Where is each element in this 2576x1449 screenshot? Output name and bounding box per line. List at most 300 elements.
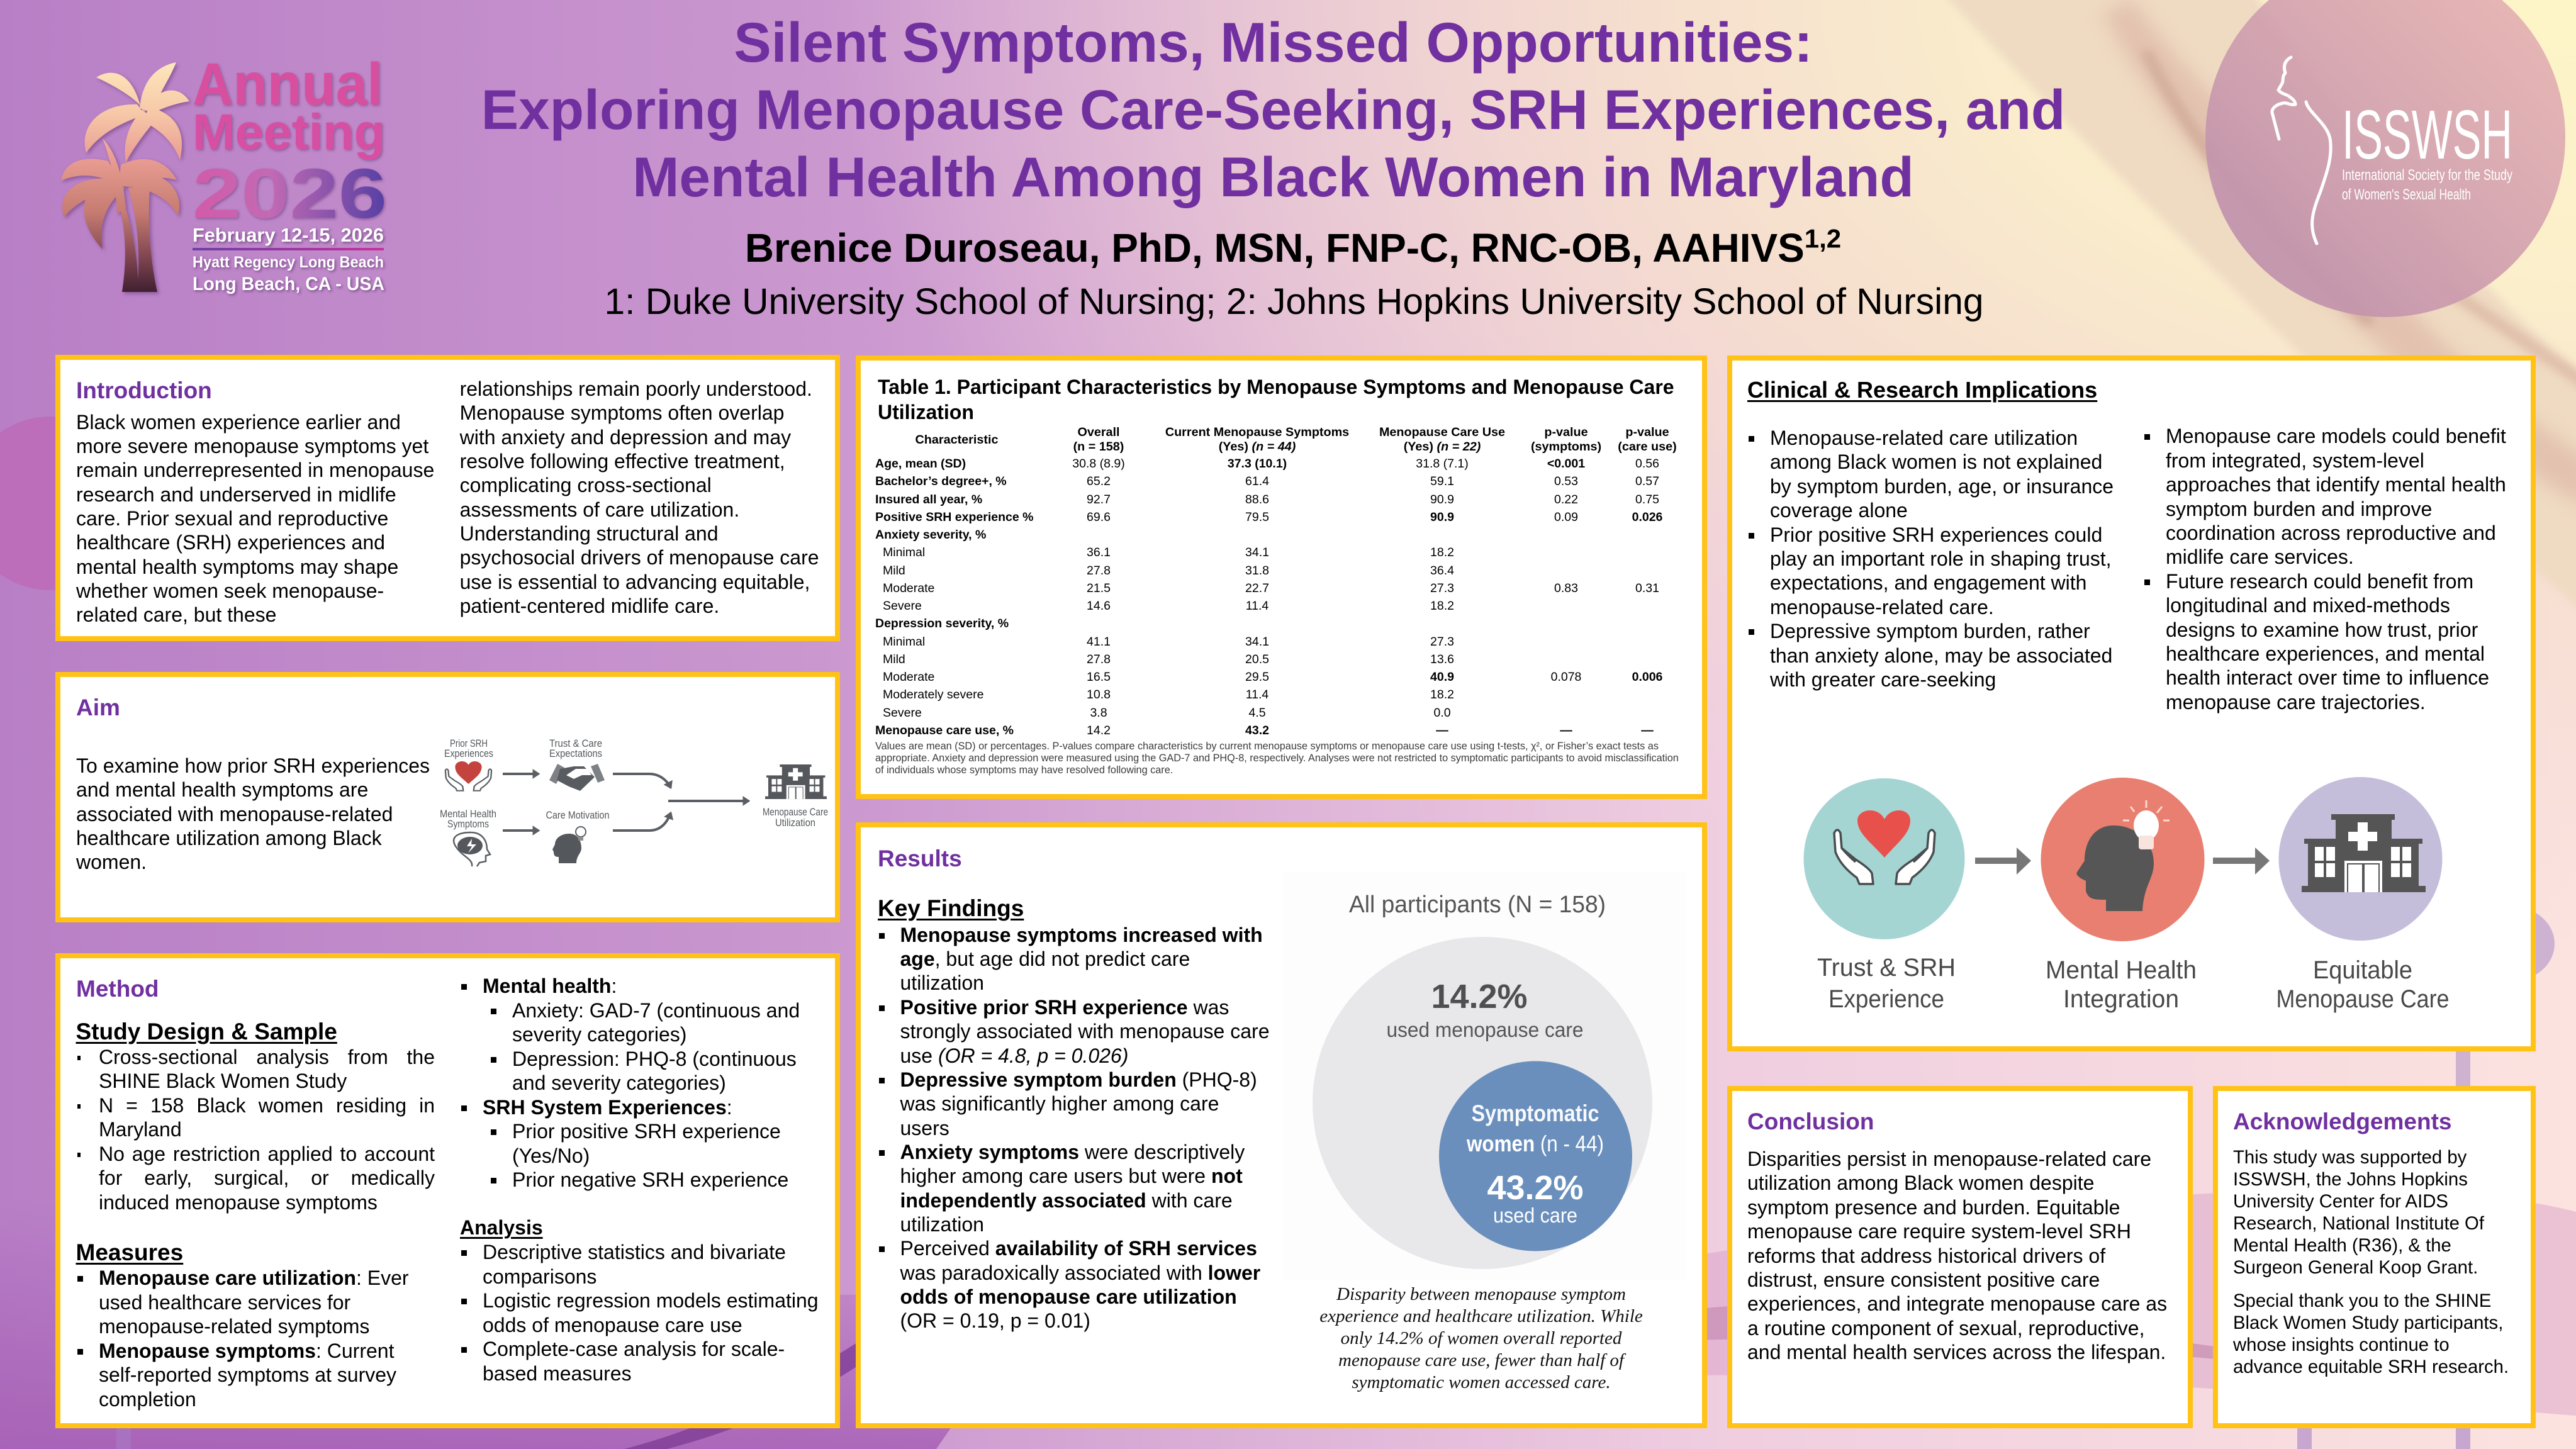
list: key findings: Anxiety symptoms were descriptively [900, 1141, 1245, 1163]
icon: brain in head [454, 832, 490, 866]
list: key findings: Positive prior SRH experience was [900, 996, 1229, 1019]
participant characteristics table: 34.1 [1245, 545, 1269, 559]
participant characteristics table: 20.5 [1245, 652, 1269, 666]
participant characteristics table: Menopause Care Use [1379, 425, 1505, 439]
list: mental health and SRH measures: Anxiety: GAD-7 (continuous and [512, 999, 800, 1022]
panel: method [55, 953, 840, 1428]
participant characteristics table: 0.22 [1554, 493, 1578, 506]
participant characteristics table: Anxiety severity, % [875, 528, 986, 542]
text: conclusion: utilization among Black women despite [1747, 1172, 2094, 1194]
text: funding: Mental Health (R36), & the [2233, 1235, 2451, 1256]
conceptual model diagram: Utilization [775, 817, 815, 829]
participant characteristics table [875, 425, 1677, 737]
heading: implications: Clinical & Research Implications [1747, 377, 2097, 403]
pathway labels: Experience [1828, 985, 1944, 1013]
text: conclusion: a routine component of sexual, reproductive, [1747, 1317, 2144, 1340]
list: mental health and SRH measures: Prior positive SRH experience [512, 1120, 781, 1143]
participant characteristics table: 90.9 [1430, 493, 1454, 506]
text: conclusion: menopause care require system-level SRH [1747, 1220, 2131, 1243]
list: implications left: coverage alone [1770, 499, 1908, 522]
title: Exploring Menopause Care-Seeking, SRH Experiences, and [481, 78, 2065, 141]
participant characteristics table: 34.1 [1245, 635, 1269, 649]
participant characteristics table: — [1560, 724, 1572, 737]
icon: head with light bulb [552, 827, 586, 863]
list: mental health and SRH measures: and severity categories) [512, 1071, 726, 1094]
panel: table 1 [856, 355, 1707, 799]
participant characteristics table: 40.9 [1430, 670, 1454, 684]
participant characteristics table: Minimal [883, 635, 925, 649]
text: introduction right column: complicating cross-sectional [460, 474, 712, 496]
table footnote: of individuals whose symptoms may have resolved following care. [875, 764, 1173, 776]
participant characteristics table: 88.6 [1245, 493, 1269, 506]
conceptual model diagram: Trust & Care [549, 737, 602, 749]
participant characteristics table: Positive SRH experience % [875, 510, 1033, 524]
heading: aim: Aim [76, 695, 120, 720]
author: Brenice Duroseau, PhD, MSN, FNP-C, RNC-OB, AAHIVS1,2 [745, 224, 1841, 271]
pathway labels: Integration [2063, 985, 2179, 1013]
list: implications right: symptom burden and improve [2166, 498, 2432, 520]
list: key findings: (OR = 0.19, p = 0.01) [900, 1309, 1090, 1332]
label: symptomatic women [1466, 1100, 1604, 1156]
list: key findings: utilization [900, 971, 984, 994]
participant characteristics table: 14.2 [1087, 724, 1111, 737]
list: analysis bullets: Logistic regression models estimating [483, 1289, 819, 1312]
participant characteristics table: 0.83 [1554, 581, 1578, 595]
text: conclusion: distrust, ensure consistent positive care [1747, 1268, 2100, 1291]
icon: hands with heart [445, 761, 491, 791]
list: key findings: Menopause symptoms increased with [900, 924, 1263, 946]
participant characteristics table: 36.4 [1430, 564, 1454, 578]
list: implications left: expectations, and engagement with [1770, 571, 2086, 594]
participant characteristics table: p-value [1625, 425, 1669, 439]
text: introduction right column: resolve following effective treatment, [460, 450, 785, 473]
list: implications left: Prior positive SRH experiences could [1770, 523, 2102, 546]
text: thanks: Special thank you to the SHINE [2233, 1290, 2491, 1311]
icon: teal circle with hands and heart [1803, 778, 1964, 939]
text: introduction right column: use is essential to advancing equitable, [460, 571, 810, 593]
list: implications right: healthcare experiences, and mental [2166, 642, 2485, 665]
logo tagline: International Society for the Study [2342, 167, 2512, 184]
participant characteristics table: 22.7 [1245, 581, 1269, 595]
subheading: measures: Measures [76, 1239, 183, 1265]
list: mental health and SRH measures [461, 975, 800, 1191]
list: key findings: strongly associated with menopause care [900, 1020, 1269, 1043]
chart caption: Disparity between menopause symptom [1336, 1284, 1626, 1304]
chart caption [1319, 1284, 1643, 1392]
text: introduction right column: with anxiety and depression and may [460, 426, 791, 449]
participant characteristics table: Mild [883, 652, 905, 666]
pathway labels: Equitable [2313, 956, 2412, 984]
participant characteristics table: Severe [883, 599, 922, 613]
conceptual model diagram: Expectations [549, 747, 602, 759]
participant characteristics table: 21.5 [1087, 581, 1111, 595]
heading: method: Method [76, 975, 159, 1002]
conceptual model diagram: Care Motivation [546, 809, 609, 821]
chart caption: symptomatic women accessed care. [1352, 1372, 1611, 1392]
list: implications left: play an important role in shaping trust, [1770, 547, 2112, 570]
list: analysis bullets: Descriptive statistics and bivariate [483, 1241, 786, 1263]
participant characteristics table: <0.001 [1547, 457, 1585, 471]
text: introduction left column: healthcare (SRH) experiences and [76, 531, 385, 554]
table footnote [875, 741, 1679, 776]
table title: Table 1. Participant Characteristics by Menopause Symptoms and Menopause Care [878, 376, 1674, 398]
text: funding [2233, 1146, 2484, 1279]
participant characteristics table: 13.6 [1430, 652, 1454, 666]
label: used menopause care: used menopause care [1387, 1018, 1583, 1041]
list: mental health and SRH measures: Mental health: [483, 975, 617, 997]
logo word: Annual: Annual [193, 51, 383, 118]
list: key findings [879, 924, 1269, 1332]
participant characteristics table: 0.56 [1635, 457, 1659, 471]
arrow: trust to convergence [613, 774, 671, 788]
text: introduction left column: remain underrepresented in menopause [76, 459, 434, 481]
list: analysis bullets: based measures [483, 1362, 632, 1385]
arrow: prior SRH to trust [503, 773, 539, 775]
participant characteristics table: 0.026 [1632, 510, 1662, 524]
participant characteristics table: Moderate [883, 670, 934, 684]
participant characteristics table: 0.57 [1635, 474, 1659, 488]
text: introduction right column: assessments of care utilization. [460, 498, 739, 521]
table footnote: appropriate. Anxiety and depression were measured using the GAD-7 and PHQ-8, respectively. Analyses were not restricted to symptomatic participants to avoid misclassification [875, 752, 1679, 764]
list: implications right [2144, 425, 2506, 713]
list: measures bullets: completion [99, 1388, 196, 1411]
list: study design bullets: Cross-sectional analysis from the [99, 1046, 435, 1068]
participant characteristics table: 27.8 [1087, 652, 1111, 666]
logo venue: Hyatt Regency Long Beach [193, 254, 384, 271]
participant characteristics table: 0.31 [1635, 581, 1659, 595]
list: implications left: menopause-related care. [1770, 596, 1994, 618]
logo location: Long Beach, CA - USA [193, 274, 384, 294]
participant characteristics table: 30.8 (8.9) [1072, 457, 1125, 471]
participant characteristics table: 27.3 [1430, 635, 1454, 649]
text: thanks: advance equitable SRH research. [2233, 1357, 2509, 1377]
arrow: mental health to equitable care [2213, 848, 2270, 875]
panel: results [856, 822, 1707, 1428]
participant characteristics table: 65.2 [1087, 474, 1111, 488]
participant characteristics table: 0.09 [1554, 510, 1578, 524]
text: introduction right column: patient-centered midlife care. [460, 595, 719, 617]
list: study design bullets [77, 1046, 435, 1213]
conceptual model diagram: Experiences [444, 747, 493, 759]
list: measures bullets [77, 1267, 409, 1411]
logo tagline [2342, 167, 2512, 203]
text: introduction left column: more severe menopause symptoms yet [76, 435, 428, 457]
participant characteristics table: Overall [1077, 425, 1120, 439]
pathway diagram [1803, 777, 2449, 1013]
logo line figure [2272, 57, 2331, 243]
chart caption: experience and healthcare utilization. While [1319, 1306, 1643, 1326]
circle: all participants [1313, 937, 1652, 1269]
label: used care: used care [1493, 1204, 1577, 1227]
list: implications left: than anxiety alone, may be associated [1770, 644, 2112, 667]
circle: symptomatic women [1439, 1061, 1632, 1251]
text: aim statement: women. [76, 851, 147, 873]
participant characteristics table: 0.078 [1551, 670, 1581, 684]
panel: clinical and research implications [1727, 355, 2536, 1051]
conference logo: Annual Meeting 2026 [61, 51, 387, 297]
title: Silent Symptoms, Missed Opportunities: [734, 11, 1813, 74]
affiliations: 1: Duke University School of Nursing; 2: Johns Hopkins University School of Nursing [605, 281, 1983, 322]
text: funding: University Center for AIDS [2233, 1191, 2448, 1212]
list: implications right: from integrated, system-level [2166, 449, 2424, 472]
list: implications left: with greater care-seeking [1770, 668, 1996, 691]
list: key findings: age, but age did not predict care [900, 948, 1190, 970]
panel: aim [55, 672, 840, 922]
label: symptomatic women: women (n - 44) [1466, 1131, 1604, 1156]
chart caption: only 14.2% of women overall reported [1341, 1328, 1622, 1348]
list: implications right: approaches that identify mental health [2166, 473, 2506, 496]
list: implications right: Menopause care models could benefit [2166, 425, 2506, 447]
list: mental health and SRH measures: SRH System Experiences: [483, 1096, 732, 1119]
logo word: Meeting: Meeting [193, 104, 385, 160]
participant characteristics table: 10.8 [1087, 688, 1111, 702]
text: introduction left column: care. Prior sexual and reproductive [76, 507, 388, 530]
list: measures bullets: self-reported symptoms at survey [99, 1363, 396, 1386]
text: introduction left column: related care, but these [76, 603, 276, 626]
participant characteristics table: 79.5 [1245, 510, 1269, 524]
list: key findings: utilization [900, 1213, 984, 1236]
list: key findings: use (OR = 4.8, p = 0.026) [900, 1044, 1128, 1067]
text: thanks: Black Women Study participants, [2233, 1312, 2503, 1333]
conceptual model diagram: Mental Health [440, 808, 496, 820]
list: analysis bullets: Complete-case analysis for scale- [483, 1338, 785, 1360]
text: conclusion: Disparities persist in menopause-related care [1747, 1148, 2151, 1170]
panel: conclusion [1727, 1086, 2193, 1428]
participant characteristics table: Age, mean (SD) [875, 457, 966, 471]
icon: lavender circle with hospital [2279, 777, 2443, 941]
nested circle chart: care use [1313, 892, 1652, 1392]
list: study design bullets: SHINE Black Women Study [99, 1070, 347, 1092]
list: study design bullets: for early, surgical, or medically [99, 1166, 435, 1189]
participant characteristics table: p-value [1544, 425, 1588, 439]
ISSWSH society logo [2205, 0, 2565, 317]
list: measures bullets: menopause-related symptoms [99, 1315, 369, 1338]
participant characteristics table: 41.1 [1087, 635, 1111, 649]
participant characteristics table: 0.75 [1635, 493, 1659, 506]
participant characteristics table: Depression severity, % [875, 617, 1009, 630]
list: analysis bullets [461, 1241, 819, 1385]
list: key findings: Depressive symptom burden (PHQ-8) [900, 1068, 1257, 1091]
list: study design bullets: No age restriction applied to account [99, 1143, 435, 1165]
subheading: study design: Study Design & Sample [76, 1018, 337, 1044]
list: study design bullets: induced menopause symptoms [99, 1190, 378, 1213]
panel: acknowledgements [2213, 1086, 2536, 1428]
list: mental health and SRH measures: Depression: PHQ-8 (continuous [512, 1047, 797, 1070]
subheading: key findings: Key Findings [878, 895, 1024, 921]
table title [878, 376, 1674, 423]
participant characteristics table: 27.8 [1087, 564, 1111, 578]
list: implications left: among Black women is not explained [1770, 450, 2102, 473]
arrow: to care utilization [668, 800, 749, 802]
list: implications right: health interact over time to influence [2166, 666, 2489, 689]
text: introduction right column [459, 378, 819, 617]
participant characteristics table: 11.4 [1246, 688, 1268, 702]
participant characteristics table: Mild [883, 564, 905, 578]
participant characteristics table: 0.0 [1433, 706, 1451, 720]
text: introduction left column: Black women experience earlier and [76, 410, 401, 433]
participant characteristics table: (n = 158) [1073, 440, 1124, 454]
participant characteristics table: 27.3 [1430, 581, 1454, 595]
icon: hospital [765, 764, 827, 799]
list: implications right: coordination across reproductive and [2166, 522, 2496, 544]
list: implications left: Menopause-related care utilization [1770, 427, 2078, 449]
list: implications left: by symptom burden, age, or insurance [1770, 475, 2114, 498]
participant characteristics table: 90.9 [1430, 510, 1454, 524]
label: symptomatic women: Symptomatic [1471, 1100, 1599, 1126]
participant characteristics table: Bachelor’s degree+, % [875, 474, 1007, 488]
title: Mental Health Among Black Women in Maryland [632, 145, 1914, 208]
text: aim statement: To examine how prior SRH experiences [76, 754, 430, 777]
participant characteristics table: (Yes) (n = 22) [1404, 440, 1481, 454]
table title: Utilization [878, 401, 974, 423]
text: aim statement: associated with menopause-related [76, 803, 393, 825]
participant characteristics table: 16.5 [1087, 670, 1111, 684]
table footnote: Values are mean (SD) or percentages. P-values compare characteristics by current menopause symptoms or menopause care use using t-tests, χ², or Fisher’s exact tests as [875, 741, 1659, 752]
text: conclusion [1747, 1147, 2167, 1365]
list: study design bullets: Maryland [99, 1118, 182, 1141]
stat: 14.2%: 14.2% [1431, 978, 1528, 1015]
text: aim statement [76, 754, 430, 873]
participant characteristics table: — [1436, 724, 1448, 737]
list: implications right: designs to examine how trust, prior [2166, 618, 2478, 641]
participant characteristics table: 36.1 [1087, 545, 1111, 559]
participant characteristics table: 14.6 [1087, 599, 1111, 613]
list: measures bullets: Menopause symptoms: Current [99, 1340, 394, 1362]
text: conclusion: experiences, and integrate menopause care as [1747, 1292, 2167, 1315]
list: analysis bullets: comparisons [483, 1265, 596, 1288]
text: introduction left column [76, 410, 434, 626]
pathway labels [1817, 954, 2449, 1013]
participant characteristics table: 92.7 [1087, 493, 1111, 506]
text: conclusion: symptom presence and burden. Equitable [1747, 1196, 2120, 1219]
text: introduction right column: Menopause symptoms often overlap [460, 401, 784, 424]
participant characteristics table: — [1641, 724, 1654, 737]
participant characteristics table: Severe [883, 706, 922, 720]
text: aim statement: and mental health symptoms are [76, 778, 368, 801]
heading: conclusion: Conclusion [1747, 1109, 1874, 1134]
logo dates: February 12-15, 2026 [193, 224, 384, 246]
list: implications right: Future research could benefit from [2166, 570, 2473, 593]
list: measures bullets: used healthcare services for [99, 1291, 350, 1314]
list: key findings: Perceived availability of SRH services [900, 1237, 1257, 1260]
subheading: analysis: Analysis [460, 1216, 543, 1239]
arrow: mental health to motivation [503, 829, 539, 832]
text: thanks: whose insights continue to [2233, 1334, 2450, 1355]
list: key findings: was significantly higher among care [900, 1092, 1219, 1115]
participant characteristics table: 3.8 [1090, 706, 1107, 720]
stat: 43.2%: 43.2% [1487, 1169, 1584, 1207]
list: implications right: midlife care services. [2166, 545, 2354, 568]
participant characteristics table: Minimal [883, 545, 925, 559]
list: key findings: users [900, 1117, 949, 1139]
text: aim statement: healthcare utilization among Black [76, 827, 382, 849]
participant characteristics table: 4.5 [1248, 706, 1266, 720]
list: implications left: Depressive symptom burden, rather [1770, 620, 2090, 642]
chart caption: menopause care use, fewer than half of [1338, 1350, 1627, 1370]
participant characteristics table: (Yes) (n = 44) [1219, 440, 1296, 454]
pathway labels: Trust & SRH [1817, 954, 1956, 982]
list: implications right: longitudinal and mixed-methods [2166, 594, 2450, 617]
participant characteristics table: Moderate [883, 581, 934, 595]
participant characteristics table: 0.006 [1632, 670, 1662, 684]
text: conclusion: reforms that address historical drivers of [1747, 1245, 2105, 1267]
participant characteristics table: 59.1 [1430, 474, 1454, 488]
participant characteristics table: 31.8 (7.1) [1416, 457, 1469, 471]
conceptual model diagram [440, 737, 828, 867]
list: implications right: menopause care trajectories. [2166, 691, 2426, 713]
list: mental health and SRH measures: Prior negative SRH experience [512, 1168, 788, 1191]
palm tree silhouette [61, 62, 189, 292]
list: study design bullets: N = 158 Black women residing in [99, 1094, 435, 1116]
arrow: motivation to convergence [613, 813, 671, 831]
participant characteristics table: Menopause care use, % [875, 724, 1014, 737]
participant characteristics table: 0.53 [1554, 474, 1578, 488]
list: measures bullets: Menopause care utilization: Ever [99, 1267, 409, 1289]
text: introduction left column: research and underserved in midlife [76, 483, 396, 506]
list: key findings: odds of menopause care utilization [900, 1285, 1237, 1308]
icon: handshake [549, 764, 605, 791]
text: funding: Research, National Institute Of [2233, 1213, 2484, 1234]
title [481, 11, 2065, 208]
participant characteristics table: Characteristic [916, 433, 998, 447]
participant characteristics table: Moderately severe [883, 688, 983, 702]
heading: acknowledgements: Acknowledgements [2233, 1109, 2451, 1134]
list: mental health and SRH measures: (Yes/No) [512, 1144, 590, 1166]
list: implications left [1749, 427, 2114, 691]
participant characteristics table: 18.2 [1430, 688, 1454, 702]
participant characteristics table: 18.2 [1430, 545, 1454, 559]
list: key findings: was paradoxically associated with lower [900, 1262, 1260, 1284]
participant characteristics table: Current Menopause Symptoms [1165, 425, 1349, 439]
participant characteristics table: (symptoms) [1531, 440, 1601, 454]
panel: introduction [55, 355, 840, 641]
text: funding: ISSWSH, the Johns Hopkins [2233, 1169, 2468, 1190]
participant characteristics table: 29.5 [1245, 670, 1269, 684]
text: funding: Surgeon General Koop Grant. [2233, 1257, 2478, 1278]
logo year: 2026: 2026 [193, 154, 387, 233]
heading: results: Results [878, 846, 962, 871]
participant characteristics table: 69.6 [1087, 510, 1111, 524]
participant characteristics table: (care use) [1618, 440, 1677, 454]
participant characteristics table: 18.2 [1430, 599, 1454, 613]
icon: coral circle with head and bulb [2041, 778, 2205, 941]
list: key findings: higher among care users but were not [900, 1165, 1243, 1187]
participant characteristics table: 31.8 [1245, 564, 1269, 578]
text: thanks [2233, 1290, 2509, 1378]
text: introduction right column: relationships remain poorly understood. [460, 378, 812, 400]
chart title: All participants (N = 158) [1349, 892, 1606, 918]
logo tagline: of Women's Sexual Health [2342, 186, 2471, 203]
participant characteristics table: 61.4 [1245, 474, 1269, 488]
text: funding: This study was supported by [2233, 1147, 2467, 1168]
heading: introduction: Introduction [76, 378, 212, 403]
list: key findings: independently associated with care [900, 1189, 1233, 1212]
list: mental health and SRH measures: severity categories) [512, 1023, 686, 1046]
pathway labels: Mental Health [2046, 956, 2197, 984]
participant characteristics table: 37.3 (10.1) [1228, 457, 1287, 471]
arrow: trust to mental health [1975, 848, 2031, 875]
text: introduction left column: whether women seek menopause- [76, 579, 384, 602]
text: introduction left column: mental health symptoms may shape [76, 556, 398, 578]
participant characteristics table: Insured all year, % [875, 493, 982, 506]
participant characteristics table: 43.2 [1245, 724, 1269, 737]
text: introduction right column: psychosocial drivers of menopause care [460, 546, 819, 569]
text: conclusion: and mental health services across the lifespan. [1747, 1341, 2166, 1363]
conceptual model diagram: Symptoms [447, 818, 489, 830]
participant characteristics table: 11.4 [1246, 599, 1268, 613]
list: analysis bullets: odds of menopause care use [483, 1314, 742, 1336]
text: introduction right column: Understanding structural and [460, 522, 719, 545]
